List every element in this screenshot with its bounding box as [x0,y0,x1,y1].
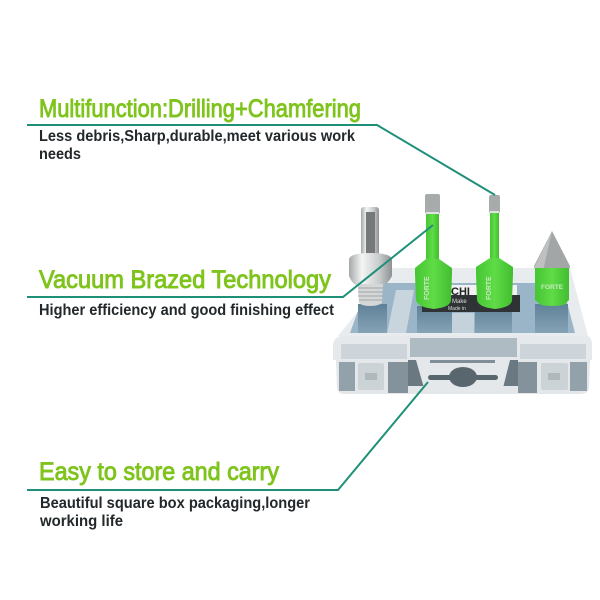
heading: vacuum brazed: Vacuum Brazed Technology [39,266,331,294]
box lower body [336,360,590,394]
product: chamfer bit: FORTE [541,284,564,291]
box handle [416,360,510,392]
leader line: multifunction [27,125,495,195]
product: hex shank adapter [349,207,392,306]
label on lid: Make [452,299,467,305]
text: multifunction description: Less debris,Sharp,durable,meet various work [39,128,355,145]
product: large drill bit [415,194,452,309]
lid inner panel [350,283,575,333]
text: multifunction description: needs [39,146,81,163]
product: small drill bit [476,195,513,309]
text: easy to store description: working life [39,513,123,530]
reflections on lid [358,290,568,333]
leader line: vacuum brazed [27,225,433,297]
heading: easy to store: Easy to store and carry [39,458,279,486]
leader line: easy to store [27,382,428,490]
box front upper rim [333,336,592,360]
box lid top [338,268,588,336]
label on lid: Made in [448,306,466,312]
product: storage box [333,268,592,394]
box right clip [541,363,568,390]
label on lid: CHI [451,286,470,298]
box left clip [358,363,384,390]
product: small drill bit: FORTE [486,276,493,300]
product: large drill bit: FORTE [424,276,431,300]
heading: multifunction: Multifunction:Drilling+Chamfering [39,95,361,123]
text: easy to store description: Beautiful square box packaging,longer [40,495,310,512]
text: vacuum brazed description: Higher efficiency and good finishing effect [39,302,334,319]
label on lid [422,285,520,312]
product: chamfer bit [534,231,570,306]
